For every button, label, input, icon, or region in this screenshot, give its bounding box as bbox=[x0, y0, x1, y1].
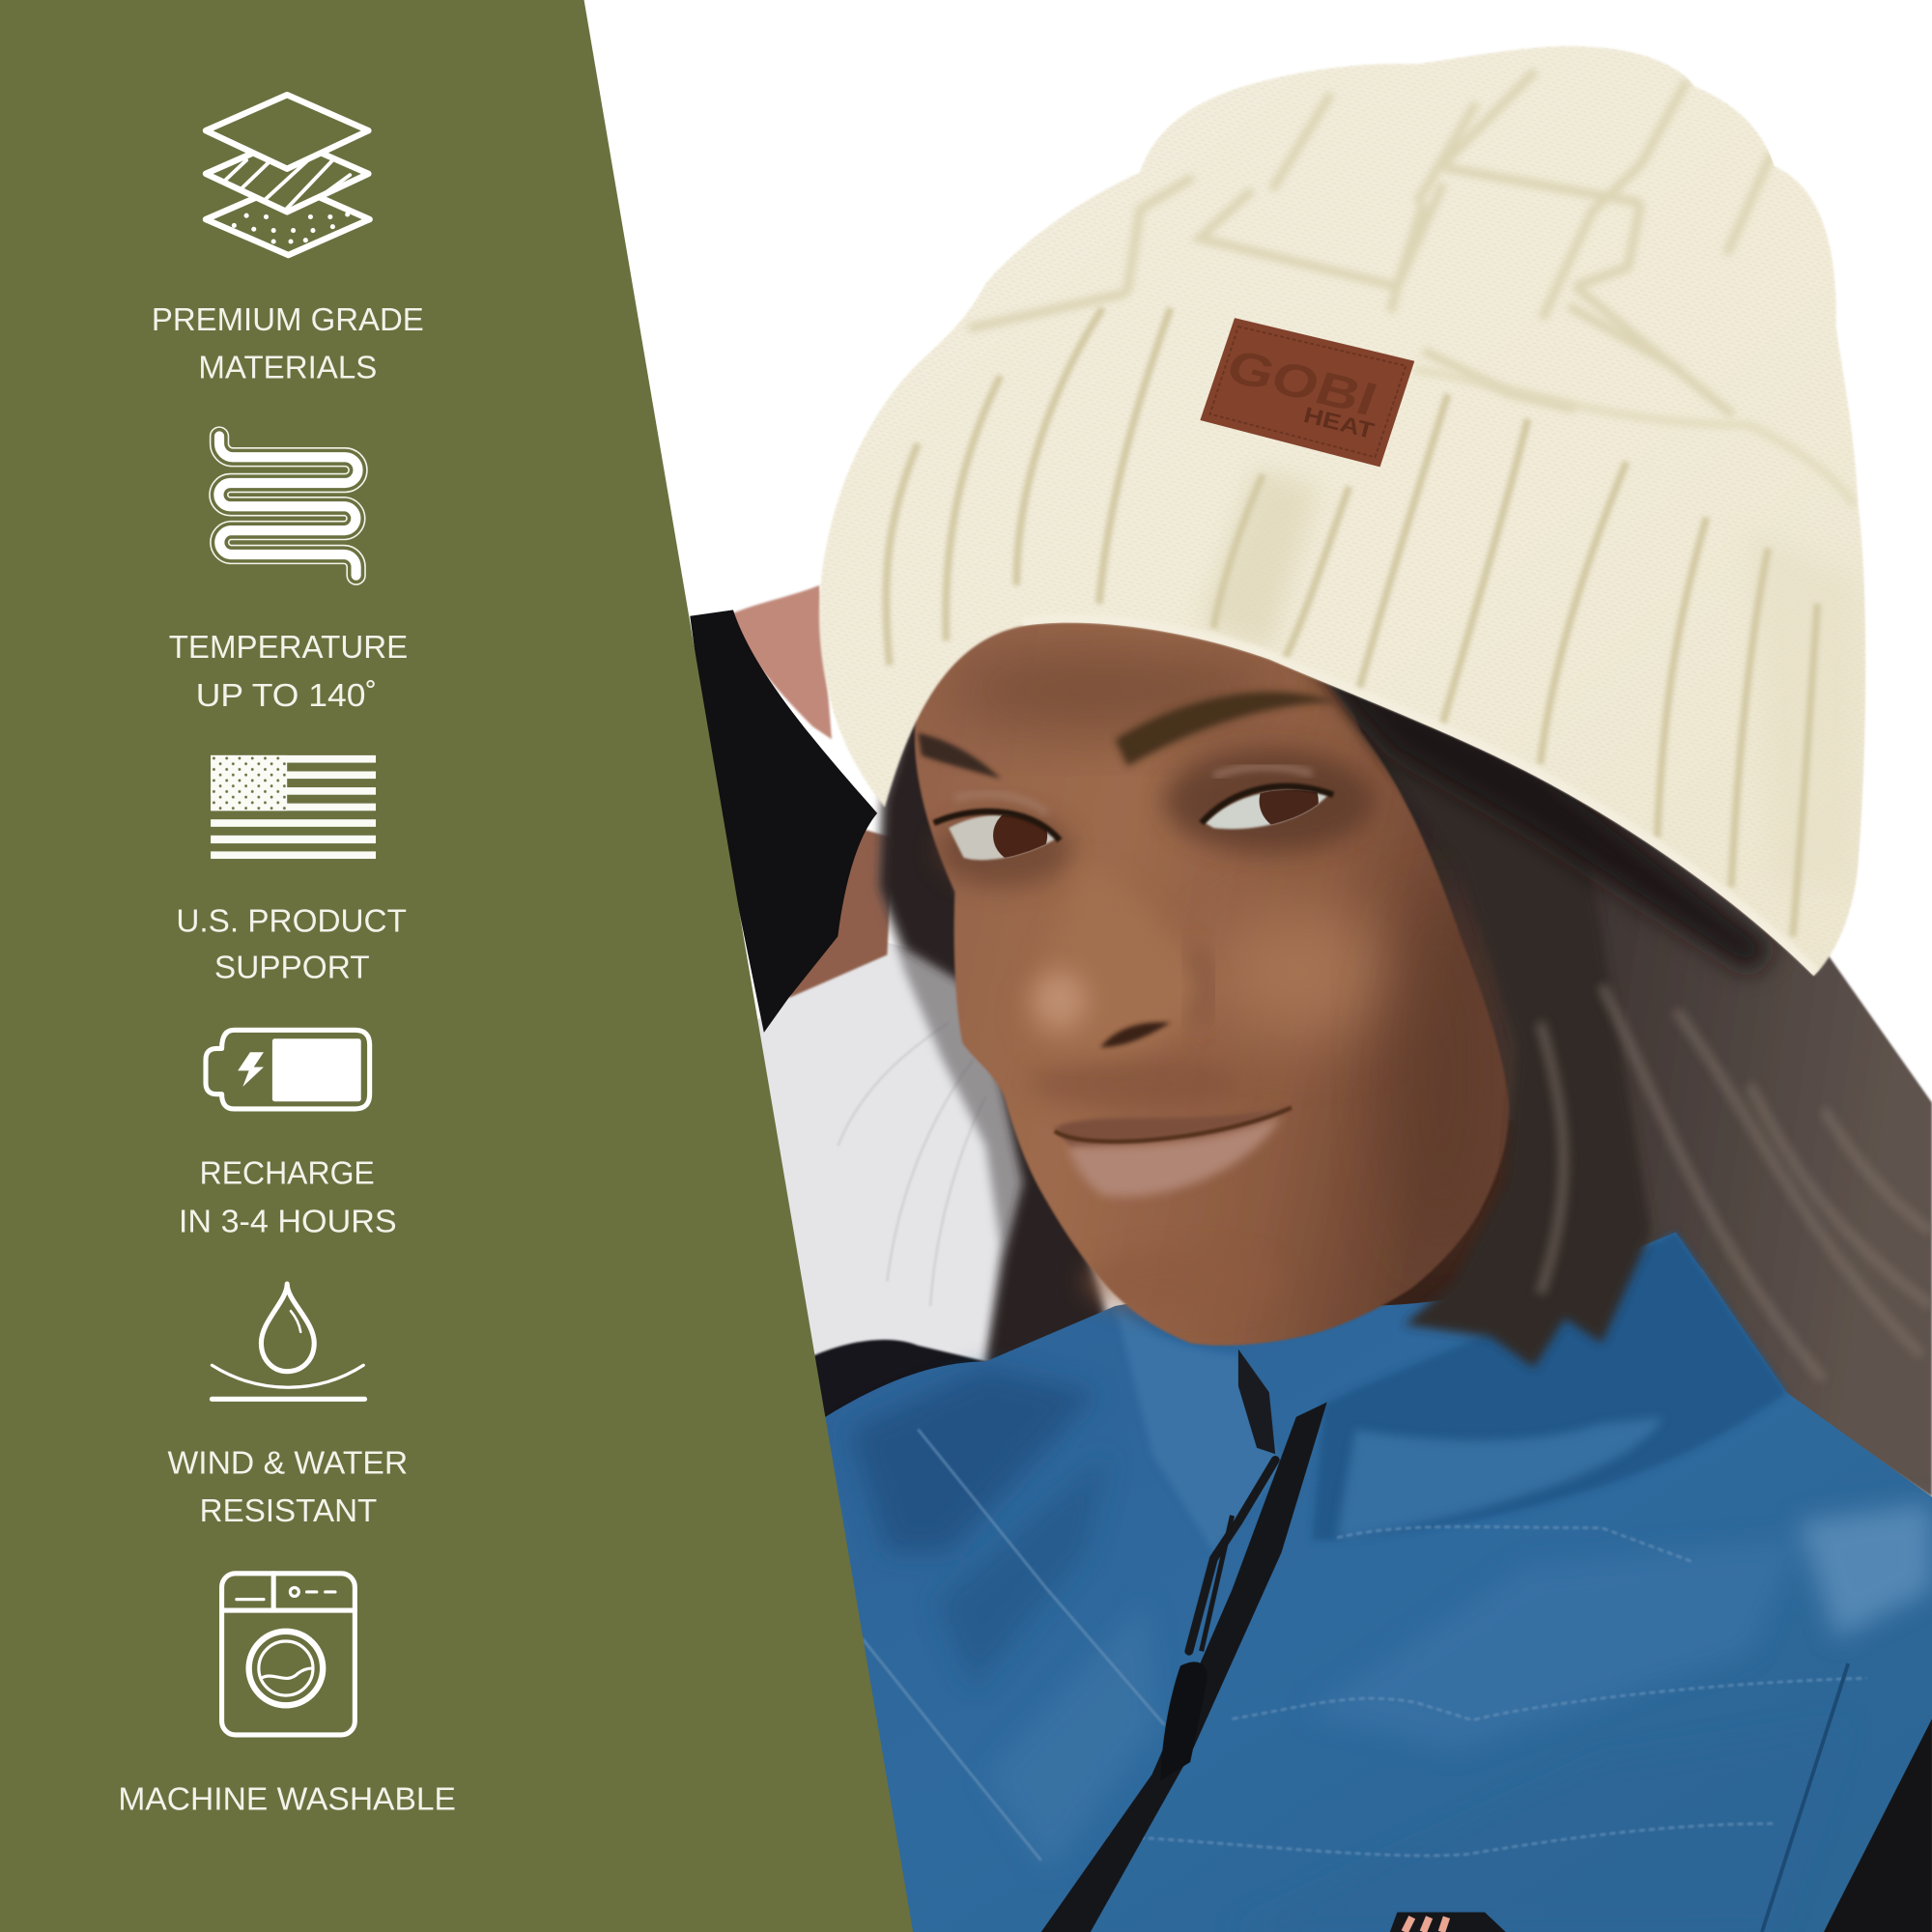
beanie cuff fold line bbox=[1414, 370, 1855, 505]
text: wind and water resistant: WIND & WATER bbox=[167, 1446, 408, 1482]
text: U.S. product support: SUPPORT bbox=[214, 951, 370, 986]
text: temperature up to 140 bbox=[169, 630, 408, 714]
facial shading and highlights bbox=[936, 647, 1497, 1312]
text: temperature up to 140: UP TO 140˚ bbox=[196, 678, 377, 714]
text: U.S. product support bbox=[176, 903, 407, 986]
right eye bbox=[1202, 767, 1333, 831]
zipper band bbox=[1041, 1350, 1327, 1932]
text: wind and water resistant: RESISTANT bbox=[200, 1493, 377, 1529]
beanie bbox=[813, 37, 1873, 985]
vest chest logo bbox=[1390, 1913, 1506, 1932]
beanie cuff ribs bbox=[886, 308, 1817, 936]
beanie lower rim bbox=[1023, 623, 1814, 976]
nose bbox=[1022, 863, 1209, 1052]
text: U.S. product support: U.S. PRODUCT bbox=[176, 903, 407, 939]
hair strands over face edge bbox=[1306, 653, 1651, 1368]
vest collar bbox=[1115, 1233, 1786, 1552]
text: recharge in 3-4 hours: RECHARGE bbox=[200, 1156, 375, 1192]
photo: woman wearing the heated beanie and blue vest bbox=[690, 37, 1932, 1932]
text: premium grade materials: PREMIUM GRADE bbox=[152, 302, 424, 338]
lighter hair streaks bbox=[1540, 985, 1932, 1380]
leather Gobi Heat patch: GOBI bbox=[1220, 340, 1383, 426]
icon: american flag bbox=[211, 755, 376, 859]
black sleeve bbox=[690, 610, 877, 1033]
text: premium grade materials: MATERIALS bbox=[198, 351, 377, 386]
vest shading bbox=[850, 1368, 1932, 1932]
panel: olive feature sidebar bbox=[0, 0, 913, 1932]
studio backdrop behind arm bbox=[739, 943, 1035, 1380]
text: recharge in 3-4 hours: IN 3-4 HOURS bbox=[179, 1205, 397, 1240]
beanie crown weave bbox=[969, 71, 1773, 415]
vest quilting seams bbox=[863, 1430, 1866, 1861]
icon: charging battery bbox=[206, 1030, 370, 1109]
icon: water drop on fabric bbox=[212, 1284, 365, 1399]
icon: layered materials bbox=[206, 95, 370, 255]
beanie soft shading bbox=[1202, 468, 1845, 813]
text: recharge in 3-4 hours bbox=[179, 1156, 397, 1240]
leather Gobi Heat patch: HEAT bbox=[1301, 402, 1377, 443]
long hair, right side, behind neck bbox=[1306, 640, 1932, 1497]
leather Gobi Heat patch bbox=[1200, 318, 1414, 467]
left eye bbox=[934, 794, 1060, 863]
flyaway hair wisps bbox=[838, 1023, 985, 1306]
face bbox=[915, 591, 1509, 1346]
text: wind and water resistant bbox=[167, 1446, 408, 1529]
vest bbox=[788, 1233, 1932, 1932]
icon: washing machine bbox=[222, 1574, 355, 1735]
right eyebrow bbox=[1115, 692, 1337, 766]
text: premium grade materials bbox=[152, 302, 424, 386]
dark hair shadow under beanie rim bbox=[1306, 653, 1775, 974]
black inner layer at lower right bbox=[1824, 1719, 1932, 1932]
text: temperature up to 140: TEMPERATURE bbox=[169, 630, 408, 666]
text: machine washable: MACHINE WASHABLE bbox=[118, 1782, 456, 1818]
left eyebrow bbox=[918, 733, 1001, 779]
beanie knit texture bbox=[813, 37, 1873, 985]
icon: heating coil bbox=[218, 437, 358, 576]
neck bbox=[1233, 1109, 1620, 1343]
black shoulder bbox=[788, 1340, 1023, 1441]
raised hand bbox=[727, 585, 894, 998]
dark hair, left side bbox=[877, 690, 1122, 1368]
mouth bbox=[1055, 1108, 1292, 1197]
